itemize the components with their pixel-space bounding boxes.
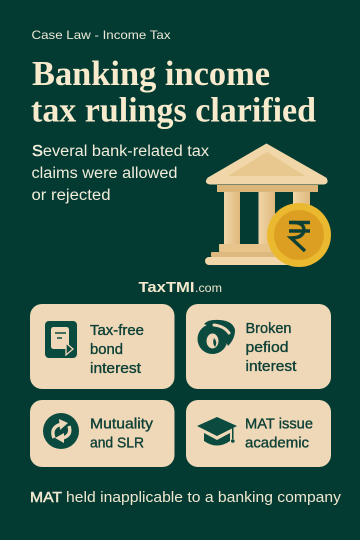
panel: MAT issue academic (186, 400, 331, 467)
icon: circular arrows (43, 413, 79, 449)
brand name: .com (195, 281, 222, 295)
panel: tax-free bond interest: Tax-free (90, 323, 144, 339)
title: Banking income (32, 54, 270, 93)
title: tax rulings clarified (31, 90, 317, 130)
brand name: TaxTMI (138, 279, 194, 296)
icon: broken ring (198, 320, 235, 354)
panel: tax-free bond interest (30, 304, 174, 389)
panel: MAT issue academic: MAT issue (245, 416, 313, 432)
panel: broken period interest: Broken (246, 321, 292, 337)
steps (219, 244, 289, 252)
subtitle text block (32, 143, 209, 204)
subtitle text block: Several bank-related tax (32, 143, 209, 160)
subtitle text block: claims were allowed (32, 165, 178, 182)
panel: mutuality and SLR: and SLR (90, 436, 144, 452)
subtitle text block: or rejected (32, 187, 110, 204)
icon: graduation cap (197, 417, 237, 446)
rupee glyph (289, 222, 310, 251)
panel: tax-free bond interest: bond (90, 342, 123, 358)
panel: mutuality and SLR (30, 400, 174, 467)
eyebrow: category label: Case Law - Income Tax (32, 28, 170, 42)
panel: MAT issue academic: academic (245, 436, 309, 452)
pediment (206, 144, 327, 184)
panel: broken period interest: interest (246, 359, 296, 375)
brand name (138, 279, 222, 296)
icon: document (45, 321, 77, 358)
coin (267, 203, 331, 267)
panel: tax-free bond interest: interest (90, 361, 141, 377)
panel: mutuality and SLR: Mutuality (90, 416, 154, 432)
icon: bank building with rupee coin (205, 144, 331, 267)
panel: broken period interest: pefiod (246, 340, 288, 356)
footer statement: MAT held inapplicable to a banking company (30, 489, 342, 506)
title (31, 54, 317, 130)
panel: broken period interest (186, 304, 331, 389)
columns (224, 192, 240, 244)
